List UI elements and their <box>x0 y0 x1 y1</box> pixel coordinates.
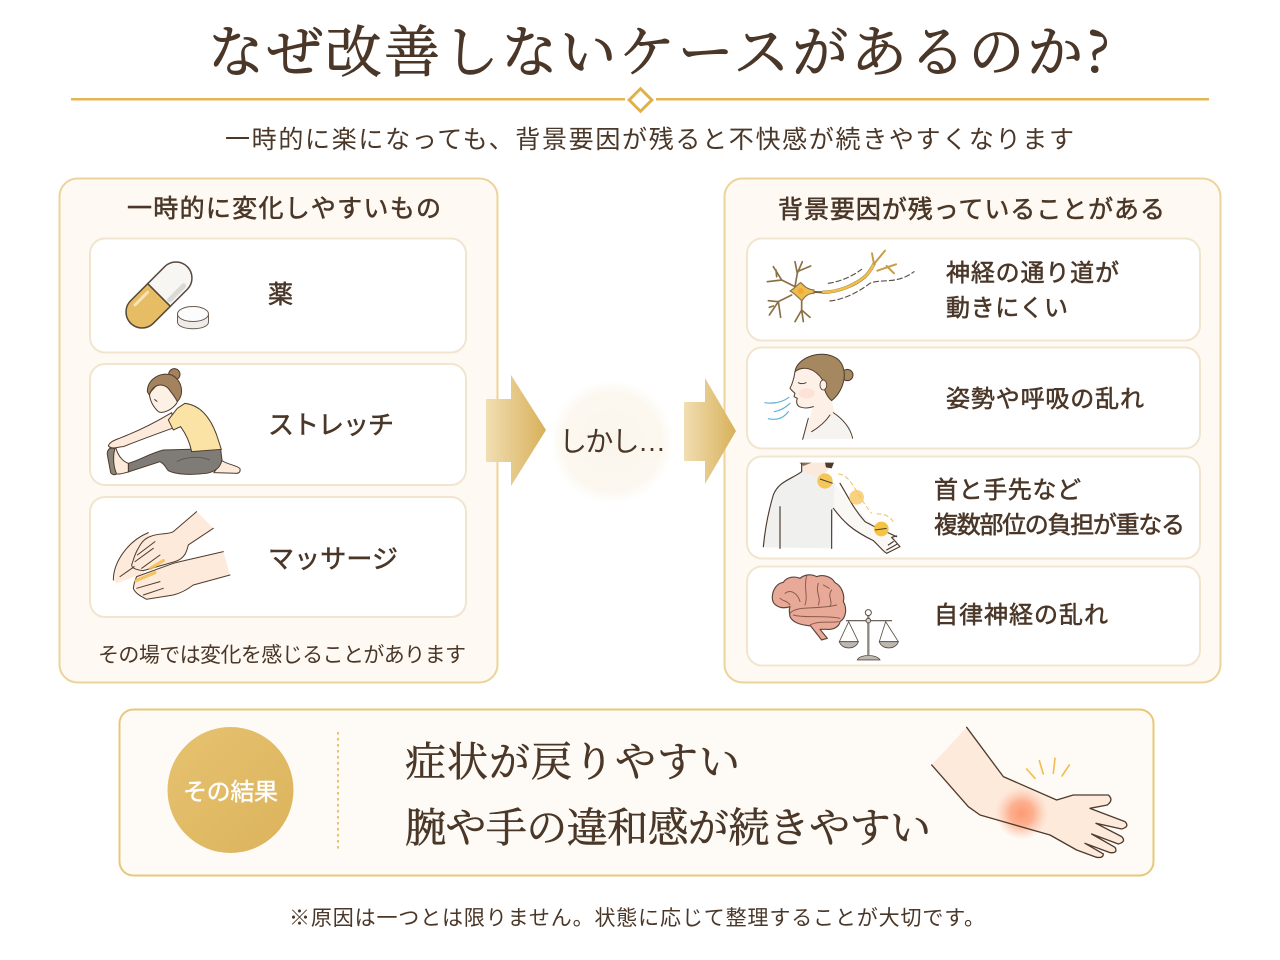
label: nerve line 2: 動きにくい <box>946 295 1068 322</box>
arrow: left to center <box>486 375 546 486</box>
title divider with diamond <box>71 89 1209 111</box>
card: massage <box>90 497 466 617</box>
icon: woman profile with breath <box>765 354 853 439</box>
title: なぜ改善しないケースがあるのか? <box>208 9 1110 89</box>
icon: shoulder and arm with highlighted points <box>763 463 900 553</box>
subtitle: 一時的に楽になっても、背景要因が残ると不快感が続きやすくなります <box>225 126 1074 154</box>
icon: massaging hands <box>113 512 230 599</box>
arrow: center to right <box>684 378 736 484</box>
footnote: ※原因は一つとは限りません。状態に応じて整理することが大切です。 <box>289 907 985 930</box>
card: multiple sites <box>747 456 1200 558</box>
label: multiple sites line 2: 複数部位の負担が重なる <box>934 512 1185 539</box>
icon: brain and balance scale <box>772 575 898 660</box>
panel: result <box>120 710 1154 876</box>
label: posture and breathing: 姿勢や呼吸の乱れ <box>946 386 1144 413</box>
label: massage: マッサージ <box>268 544 398 574</box>
result line 2: 腕や手の違和感が続きやすい <box>405 805 931 851</box>
result badge <box>168 727 294 853</box>
label: multiple sites line 1: 首と手先など <box>934 477 1081 504</box>
panel heading: 背景要因が残っていることがある <box>778 196 1165 224</box>
result line 1: 症状が戻りやすい <box>405 739 740 785</box>
label: medicine: 薬 <box>268 281 293 309</box>
card: stretch <box>90 364 466 485</box>
card: autonomic nerves <box>747 566 1200 666</box>
panel heading: 一時的に変化しやすいもの <box>127 195 441 223</box>
label: stretch: ストレッチ <box>268 410 394 440</box>
label: nerve line 1: 神経の通り道が <box>946 260 1119 287</box>
center text: しかし… <box>559 426 666 457</box>
panel caption: その場では変化を感じることがあります <box>98 644 466 667</box>
card: medicine <box>90 238 466 352</box>
icon: arm with wrist pain <box>932 727 1127 858</box>
panel: background factors <box>724 178 1220 682</box>
label: autonomic nerves: 自律神経の乱れ <box>934 602 1108 629</box>
icon: capsule and tablet <box>119 255 208 335</box>
center bubble: however <box>550 380 674 504</box>
result badge text: その結果 <box>183 779 278 806</box>
icon: neuron <box>767 251 914 322</box>
card: posture and breathing <box>747 348 1200 448</box>
panel: temporary changes <box>60 178 498 682</box>
card: nerve <box>747 238 1200 340</box>
icon: woman stretching <box>107 369 240 475</box>
